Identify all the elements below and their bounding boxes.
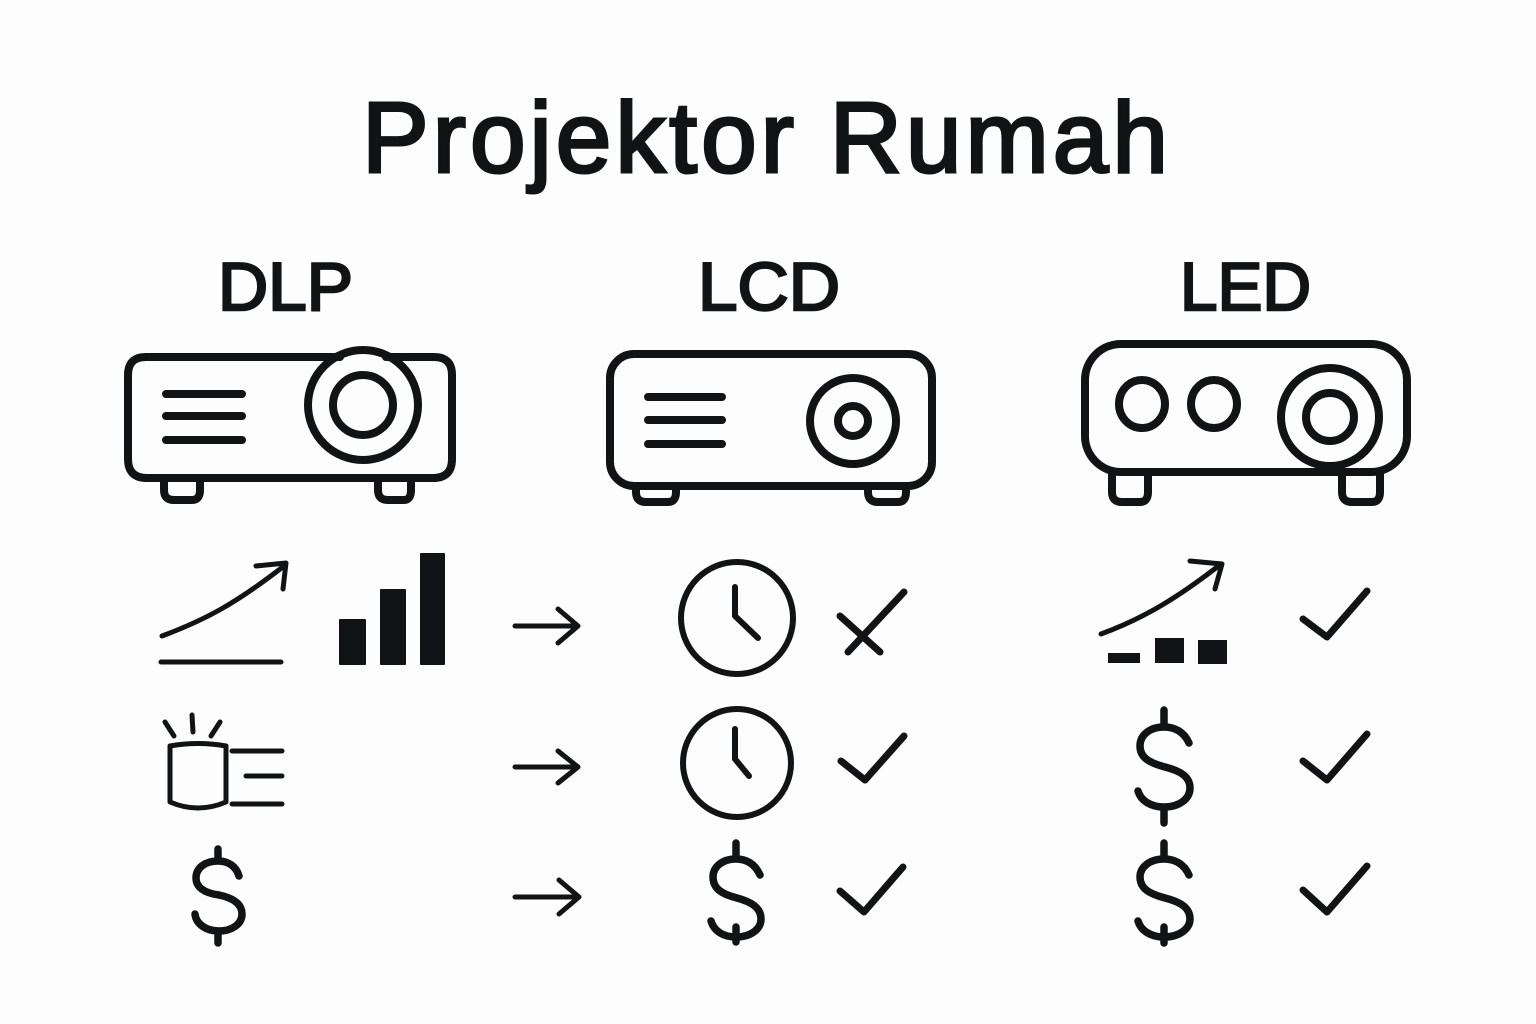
heading: LED: LED — [1180, 249, 1311, 325]
icon: check mark — [1303, 591, 1367, 637]
icon: rising line chart — [161, 563, 286, 662]
icon: dollar — [711, 843, 761, 942]
icon: check mark — [840, 867, 903, 912]
icon: LED projector — [1085, 344, 1407, 502]
arrow row 1 — [515, 609, 578, 643]
heading: DLP: DLP — [218, 249, 353, 325]
icon: clock — [681, 562, 793, 674]
icon: small bars — [1108, 638, 1227, 664]
title: Projektor Rumah — [362, 82, 1168, 194]
heading: LCD: LCD — [698, 249, 840, 325]
icon: dollar — [1138, 843, 1190, 943]
icon: dollar small — [195, 849, 242, 943]
icon: check mark — [841, 736, 904, 780]
icon: check mark — [1303, 734, 1367, 780]
icon: LCD projector — [610, 354, 932, 502]
icon: DLP projector — [128, 350, 452, 500]
icon: bar chart — [339, 553, 445, 665]
arrow row 2 — [515, 751, 578, 783]
icon: lamp brightness — [165, 715, 282, 808]
icon: clock — [683, 709, 791, 817]
icon: cross mark — [840, 592, 904, 652]
icon: dollar — [1138, 710, 1190, 823]
icon: rising line with small bars — [1101, 561, 1222, 634]
icon: check mark — [1303, 866, 1367, 912]
arrow row 3 — [515, 880, 579, 914]
